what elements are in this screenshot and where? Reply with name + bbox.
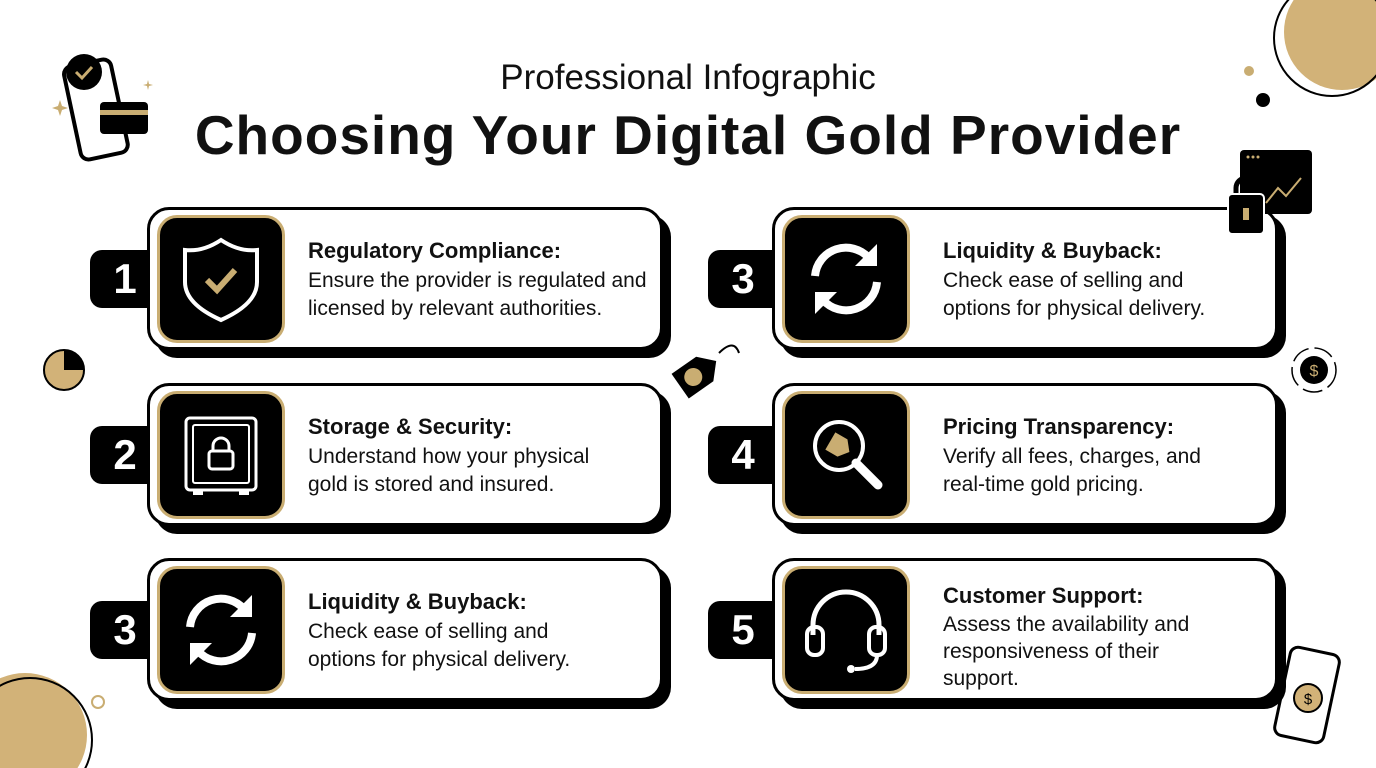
text 3 left [308,589,570,671]
card 5: support [708,558,1286,709]
icon: headset [782,566,910,694]
text 3 right: Liquidity & Buyback: [943,238,1162,263]
text 3 right: Check ease of selling and [943,269,1184,292]
text 4: Verify all fees, charges, and [943,445,1201,468]
text 5: Customer Support: [943,583,1143,608]
icon: dollar coin exchange: $ [1310,363,1319,380]
icon: browser with lock and chart [1227,150,1312,233]
decor: bottom-left gold circle [0,673,105,768]
number badge 4: 4 [731,431,755,478]
decor: top-right gold circle [1273,0,1376,97]
text 5: Assess the availability and [943,613,1189,636]
text 3 left: Liquidity & Buyback: [308,589,527,614]
decor: dots [1244,66,1270,107]
icon: price tag [672,344,740,398]
number badge 1: 1 [113,255,137,302]
text 5: support. [943,667,1019,690]
icon: phone with coin [1273,646,1341,744]
card 2: storage [90,383,671,534]
text 5 [943,583,1189,690]
icon: refresh arrows [782,215,910,343]
number badge 3 [90,601,160,659]
card 4: pricing [708,383,1286,534]
icon: phone with coin: $ [1304,691,1313,708]
number badge 3 right: 3 [731,255,755,302]
number badge 5: 5 [731,606,755,653]
text 2: Storage & Security: [308,414,512,439]
text 2: gold is stored and insured. [308,473,554,496]
icon: pie chart [43,349,85,391]
number badge 2 [90,426,160,484]
text 3 right: options for physical delivery. [943,297,1205,320]
text 4 [943,414,1201,496]
subtitle: Professional Infographic [500,58,876,97]
number badge 1 [90,250,160,308]
card 3 left: liquidity [90,558,671,709]
text 2 [308,414,589,496]
number badge 2: 2 [113,431,137,478]
card 1: regulatory compliance [90,207,671,358]
text 4: Pricing Transparency: [943,414,1174,439]
icon: dollar coin exchange [1291,347,1337,393]
text 3 left: Check ease of selling and [308,620,548,643]
number badge 4 [708,426,778,484]
icon: shield check [157,215,285,343]
text 2: Understand how your physical [308,445,589,468]
text 4: real-time gold pricing. [943,473,1144,496]
icon: refresh arrows [157,566,285,694]
text 1: Ensure the provider is regulated and [308,269,647,292]
number badge 5 [708,601,778,659]
number badge 3 right [708,250,778,308]
icon: safe [157,391,285,519]
title: Choosing Your Digital Gold Provider [195,104,1181,166]
card 3 right: liquidity [708,207,1286,358]
icon: magnifier tag [782,391,910,519]
number badge 3: 3 [113,606,137,653]
text 5: responsiveness of their [943,640,1159,663]
text 1: licensed by relevant authorities. [308,297,602,320]
icon: phone with check and card [52,54,153,162]
text 3 left: options for physical delivery. [308,648,570,671]
text 3 right [943,238,1205,320]
text 1: Regulatory Compliance: [308,238,561,263]
text 1 [308,238,647,320]
